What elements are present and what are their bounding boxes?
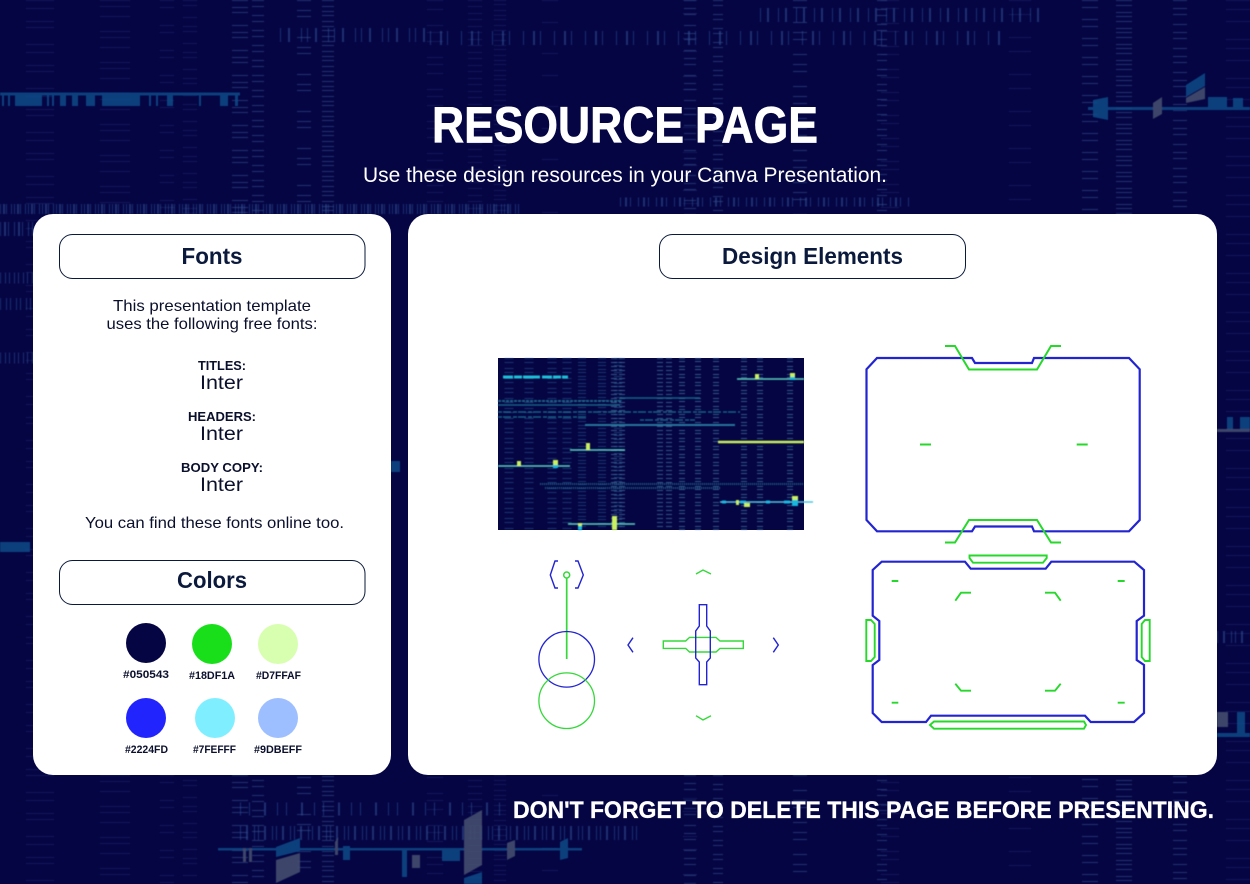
text block: font list: Inter (200, 424, 244, 445)
heading: colors (60, 560, 365, 604)
color swatches: #18DF1A (189, 670, 235, 682)
text block: font note: You can find these fonts online too. (85, 515, 344, 532)
text block: font list (181, 358, 263, 496)
color swatches: #9DBEFF (254, 744, 302, 756)
text block: font list: BODY COPY: (181, 460, 263, 475)
title: PAGE (695, 96, 818, 154)
text block: font list: TITLES: (198, 358, 246, 373)
subtitle: Use these design resources in your Canva Presentation. (363, 164, 887, 187)
color swatches (123, 623, 302, 756)
color swatches: #7FEFFF (193, 744, 236, 756)
color swatches: #050543 (123, 669, 169, 681)
heading: design elements: Design Elements (722, 243, 903, 269)
text block: font intro (106, 298, 318, 333)
color swatches: #2224FD (125, 744, 168, 756)
text block: font intro: This presentation template (113, 298, 311, 315)
frame element: notched panel (866, 346, 1140, 542)
data texture thumbnail (498, 358, 813, 530)
text block: font list: HEADERS: (188, 409, 256, 424)
footer reminder: DON'T FORGET TO DELETE THIS PAGE BEFORE PRESENTING. (513, 797, 1214, 824)
text block: font list: Inter (200, 475, 244, 496)
text block: font intro: uses the following free fonts: (106, 316, 318, 333)
heading: colors: Colors (177, 567, 247, 593)
icon: crosshair with chevrons (628, 570, 778, 720)
frame element: tabbed panel (866, 556, 1150, 729)
heading: design elements (660, 234, 966, 278)
panel: fonts and colors (33, 214, 391, 775)
heading: fonts: Fonts (182, 243, 242, 269)
title: RESOURCE (432, 96, 684, 154)
text block: font list: Inter (200, 373, 244, 394)
heading: fonts (60, 234, 365, 278)
panel: design elements (408, 214, 1217, 775)
color swatches: #D7FFAF (256, 670, 301, 682)
icon: pin with circles (539, 561, 594, 728)
